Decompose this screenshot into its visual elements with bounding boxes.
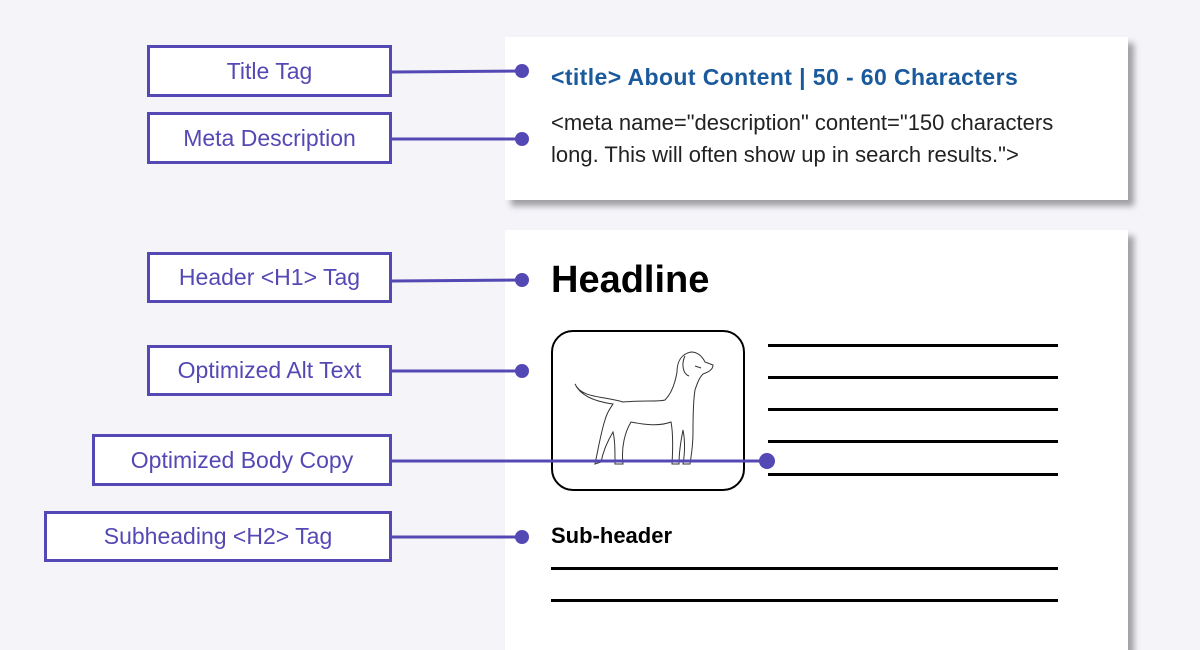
- image box with dog: [551, 330, 745, 491]
- icon: dog: [575, 352, 713, 464]
- text lines: [768, 344, 1058, 347]
- label: Meta Description: [147, 112, 392, 164]
- sub-header: Sub-header: [551, 523, 672, 548]
- label: Subheading H2: [44, 511, 392, 562]
- headline: Headline: [551, 259, 709, 301]
- label: Meta Description: Meta Description: [183, 124, 356, 150]
- label: Body Copy: [92, 434, 392, 486]
- label: Alt Text: Optimized Alt Text: [178, 357, 361, 383]
- label: Header H1: [147, 252, 392, 303]
- label: Body Copy: Optimized Body Copy: [131, 446, 353, 472]
- label: Title Tag: Title Tag: [227, 58, 312, 84]
- title tag text: <title> About Content | 50 - 60 Characters: [551, 64, 1018, 90]
- label: Subheading H2: Subheading <H2> Tag: [104, 523, 332, 549]
- panel: head section: [505, 37, 1128, 200]
- label: Alt Text: [147, 345, 392, 396]
- panel: body section: [505, 230, 1128, 650]
- label: Title Tag: [147, 45, 392, 97]
- meta description text: <meta name="description" content="150 characters long. This will often show up in search results.">: [551, 110, 1053, 167]
- label: Header H1: Header <H1> Tag: [179, 264, 360, 290]
